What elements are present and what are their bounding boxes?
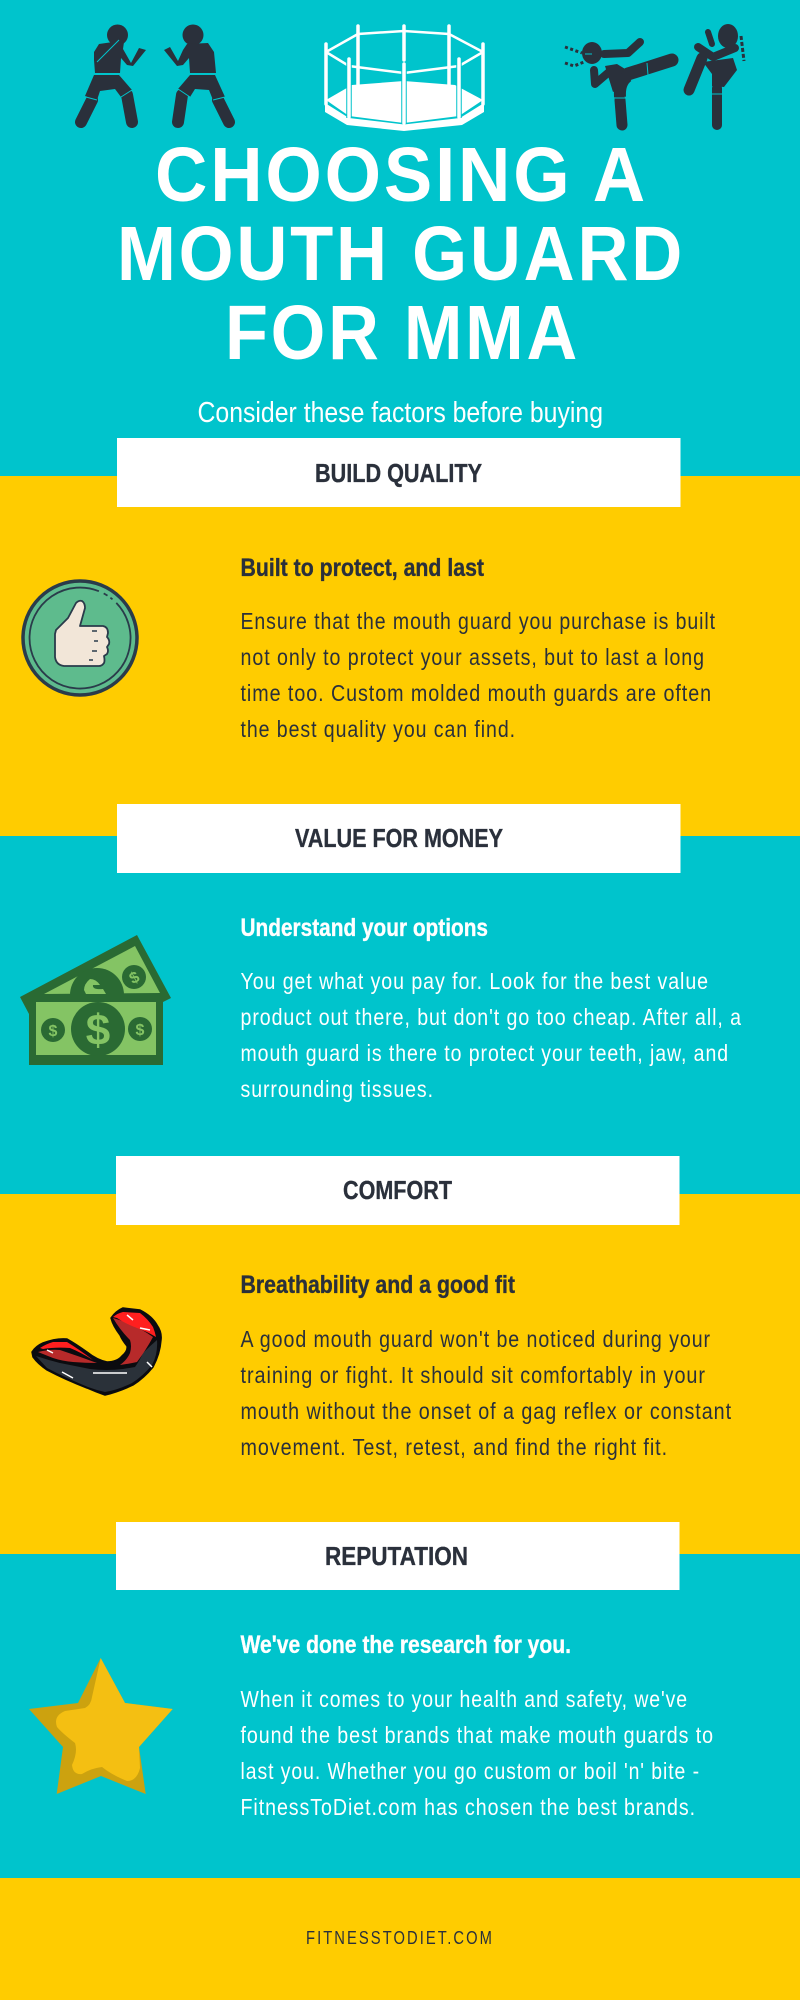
section header: reputation (116, 1522, 680, 1590)
text block: build quality (240, 554, 716, 742)
text block: reputation (240, 1631, 714, 1820)
panel: reputation band (0, 1554, 800, 1878)
icon: mouth guard (32, 1308, 161, 1395)
section header: comfort: COMFORT (343, 1175, 452, 1205)
section header: comfort (116, 1156, 680, 1225)
icon: right kicking fighter (689, 24, 744, 125)
text block: reputation: FitnessToDiet.com has chosen the best brands. (240, 1794, 696, 1820)
icon: banknotes: $ (49, 1023, 58, 1040)
text block: value for money (240, 914, 742, 1102)
icon: left boxer (81, 24, 146, 122)
text block: comfort: training or fight. It should sit comfortably in your (240, 1362, 706, 1388)
icon: star (29, 1658, 173, 1794)
text block: value for money: You get what you pay for. Look for the best value (240, 968, 709, 994)
text block: reputation: We've done the research for you. (240, 1631, 571, 1659)
text block: build quality: Ensure that the mouth guard you purchase is built (240, 608, 716, 634)
section header: reputation: REPUTATION (325, 1541, 468, 1571)
text block: reputation: found the best brands that make mouth guards to (240, 1722, 714, 1748)
icon: thumbs up badge (23, 581, 137, 695)
icon: banknotes: $ (136, 1022, 145, 1039)
text block: build quality: Built to protect, and last (240, 554, 485, 582)
text block: reputation: last you. Whether you go custom or boil 'n' bite - (240, 1758, 700, 1784)
text block: build quality: not only to protect your assets, but to last a long (240, 644, 705, 670)
title: FOR MMA (225, 290, 580, 376)
text block: comfort: mouth without the onset of a gag reflex or constant (240, 1398, 732, 1424)
text block: build quality: the best quality you can find. (240, 716, 516, 742)
title (117, 132, 685, 376)
icon: banknotes (20, 935, 171, 1065)
icon: left kicking fighter (565, 42, 672, 125)
panel: build quality band (0, 476, 800, 836)
section header: value for money (117, 804, 680, 873)
panel: footer band (0, 1878, 800, 2000)
title: CHOOSING A (155, 132, 648, 218)
text block: comfort (240, 1271, 732, 1460)
text block: value for money: mouth guard is there to protect your teeth, jaw, and (240, 1040, 729, 1066)
text block: value for money: Understand your options (240, 914, 488, 942)
panel: value for money band (0, 836, 800, 1194)
text block: reputation: When it comes to your health and safety, we've (240, 1686, 688, 1712)
icon: banknotes: $ (86, 1006, 110, 1055)
subtitle: Consider these factors before buying (198, 397, 603, 429)
section header: value for money: VALUE FOR MONEY (295, 823, 503, 853)
text block: comfort: A good mouth guard won't be noticed during your (240, 1326, 711, 1352)
icon: octagon fighting cage (325, 26, 484, 131)
icon: right boxer (164, 24, 229, 122)
section header: build quality (117, 438, 680, 507)
text block: comfort: Breathability and a good fit (240, 1271, 516, 1299)
text block: value for money: surrounding tissues. (240, 1076, 434, 1102)
footer: website: FITNESSTODIET.COM (306, 1927, 494, 1948)
panel: header background (0, 0, 800, 476)
section header: build quality: BUILD QUALITY (315, 458, 482, 488)
icon: two boxers (81, 24, 229, 122)
text block: comfort: movement. Test, retest, and find the right fit. (240, 1434, 668, 1460)
icon: two kicking fighters (565, 24, 744, 125)
text block: build quality: time too. Custom molded mouth guards are often (240, 680, 712, 706)
icon: banknotes: $ (127, 969, 143, 988)
panel: comfort band (0, 1194, 800, 1554)
title: MOUTH GUARD (117, 211, 685, 297)
